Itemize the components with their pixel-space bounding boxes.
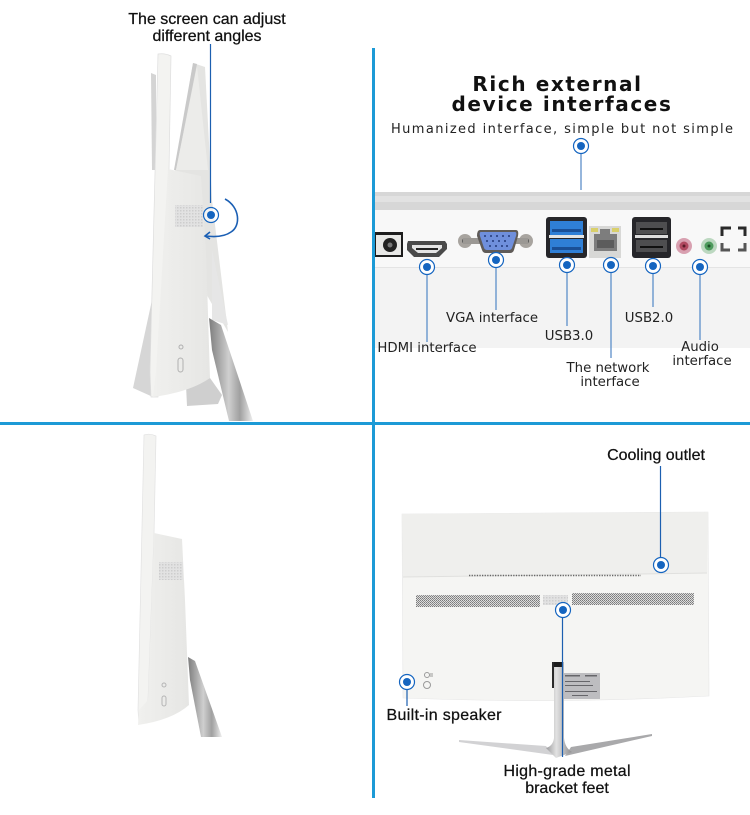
monitor front panel — [150, 54, 171, 397]
panel: external interfaces — [375, 72, 750, 390]
callout: USB2.0 — [625, 258, 673, 326]
metal stand, side — [188, 657, 222, 737]
metal bracket neck and feet — [459, 662, 652, 758]
heading: device interfaces — [452, 92, 672, 116]
port: power jack — [375, 232, 403, 257]
rear side icons — [424, 672, 433, 688]
port: square bracket outline — [722, 228, 745, 250]
callout: VGA interface — [446, 252, 538, 326]
callout: bracket feet: High-grade metal — [504, 763, 630, 780]
port: VGA — [458, 230, 533, 253]
callout: network interface: The network — [566, 361, 650, 376]
callout: USB2.0: USB2.0 — [625, 311, 673, 326]
cooling slot row — [469, 574, 641, 576]
heading — [452, 72, 672, 116]
port: HDMI — [407, 241, 447, 257]
callout: built-in speaker: Built-in speaker — [386, 707, 502, 724]
rotation arrow — [205, 199, 238, 239]
vent on housing — [175, 205, 203, 227]
vent, side — [159, 562, 183, 580]
port: USB 2.0 — [632, 217, 671, 258]
subheading: Humanized interface, simple but not simple — [391, 122, 733, 137]
metal stand, upper view — [209, 318, 253, 421]
side buttons — [178, 345, 183, 372]
callout marker and leader — [204, 44, 218, 222]
port: network RJ45 — [589, 226, 621, 258]
callout: network interface — [566, 258, 650, 390]
caption: screen angle — [128, 11, 286, 45]
callout: HDMI interface: HDMI interface — [377, 341, 477, 356]
port: USB 3.0 — [546, 217, 587, 258]
callout: audio interface: interface — [672, 354, 732, 369]
speaker grilles — [416, 593, 694, 607]
monitor front panel, side — [138, 434, 156, 724]
callout: built-in speaker — [386, 674, 502, 724]
callout: cooling outlet — [607, 447, 705, 572]
heading: Rich external — [472, 72, 643, 96]
caption: screen angle: different angles — [152, 28, 262, 45]
callout: bracket feet — [504, 602, 630, 797]
port: audio jacks — [676, 238, 717, 254]
panel: screen angle adjustment — [128, 11, 286, 421]
panel: straight side view — [138, 434, 222, 737]
callout: audio interface: Audio — [681, 340, 719, 355]
top marker with leader — [574, 138, 588, 190]
back panel photograph: housing — [375, 192, 750, 348]
callout: USB3.0 — [545, 258, 593, 344]
callout: VGA interface: VGA interface — [446, 311, 538, 326]
monitor rear housing — [153, 169, 210, 397]
callout: network interface: interface — [580, 375, 640, 390]
product label — [563, 673, 600, 699]
side buttons, lower — [162, 683, 166, 706]
callout: HDMI interface — [377, 260, 477, 356]
callout: USB3.0: USB3.0 — [545, 329, 593, 344]
callout: cooling outlet: Cooling outlet — [607, 447, 705, 464]
monitor rear shell — [402, 512, 709, 701]
monitor rear housing, side — [138, 533, 189, 725]
callout: bracket feet: bracket feet — [525, 780, 609, 797]
callout: audio interface — [672, 260, 732, 369]
panel: rear view — [386, 447, 709, 797]
caption: screen angle: The screen can adjust — [128, 11, 286, 28]
monitor side view, tilted positions — [133, 63, 228, 406]
